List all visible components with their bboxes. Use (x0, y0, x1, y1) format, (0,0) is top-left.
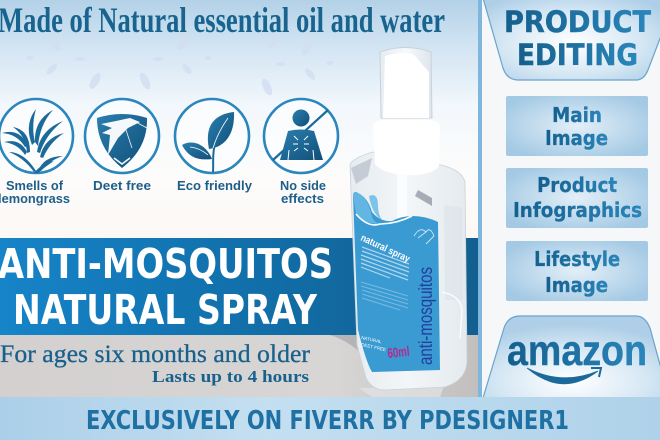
banner title: NATURAL SPRAY (13, 286, 318, 334)
icon labels: Smells of (6, 178, 64, 193)
icon: deet free shield (85, 99, 159, 173)
banner title: ANTI-MOSQUITOS (0, 240, 333, 288)
icon: lemongrass (0, 99, 73, 173)
button: product infographics (506, 168, 648, 228)
button: product infographics: Product (537, 173, 617, 197)
background panel (0, 0, 478, 238)
product bottle (350, 48, 467, 397)
icon labels: effects (281, 191, 324, 206)
button: lifestyle image (506, 241, 648, 301)
product bottle: anti-mosquitos (416, 267, 437, 365)
icon: no side effects (264, 99, 338, 173)
amazon badge (483, 316, 660, 398)
side panel (482, 0, 660, 397)
product bottle: NATURAL (361, 335, 383, 344)
heading: product editing: EDITING (517, 38, 638, 72)
button: main image: Image (545, 126, 608, 150)
heading: product editing: PRODUCT (504, 5, 651, 39)
button: product infographics: Infographics (513, 198, 642, 222)
button: main image (506, 96, 648, 156)
header badge (483, 0, 660, 80)
subtitle: ages: For ages six months and older (0, 341, 311, 368)
icon labels: Deet free (93, 178, 151, 193)
product bottle: DEET FREE (361, 342, 386, 352)
button: lifestyle image: Lifestyle (534, 247, 620, 271)
grey band (0, 335, 478, 397)
icon: eco friendly leaf (175, 99, 249, 173)
banner (0, 238, 478, 335)
product bottle: 60ml (387, 343, 410, 361)
button: main image: Main (552, 103, 602, 127)
icon labels: Eco friendly (177, 178, 253, 193)
product bottle: natural spray (359, 233, 412, 265)
decorative leaves (26, 23, 416, 97)
icon labels: lemongrass (0, 191, 70, 206)
title: Made of Natural essential oil and water (0, 0, 445, 40)
footer band (0, 397, 660, 440)
banner title (0, 240, 333, 334)
heading: product editing (504, 5, 651, 72)
icon labels (0, 178, 326, 206)
icon labels: No side (280, 178, 326, 193)
subtitle: duration: Lasts up to 4 hours (152, 367, 310, 386)
button: lifestyle image: Image (545, 273, 608, 297)
